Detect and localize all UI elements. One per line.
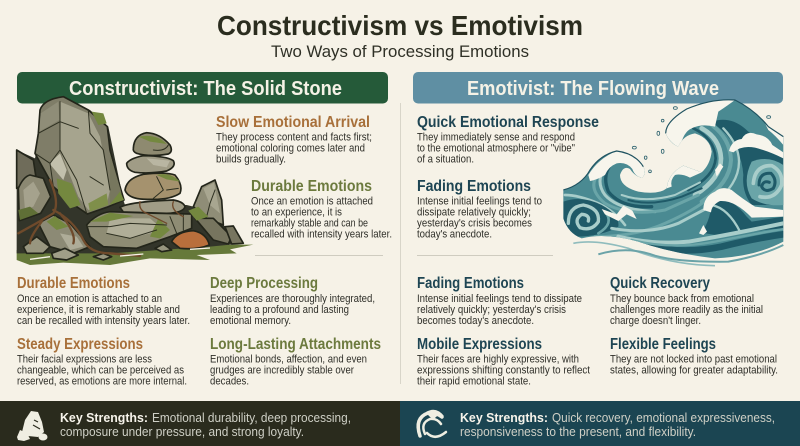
block: fading emotions (upper): yesterday's crisis becomes <box>417 218 533 230</box>
key strengths text: responsiveness to the present, and flexibility. <box>460 424 696 439</box>
constructivist header: Constructivist: The Solid Stone <box>69 78 342 100</box>
block: mobile expressions: expressions shifting constantly to reflect <box>417 364 590 376</box>
block: durable emotions (upper): remarkably stable and can be <box>251 218 368 230</box>
block: durable emotions (upper): recalled with intensity years later. <box>251 228 392 240</box>
block: quick recovery: They bounce back from emotional <box>610 293 754 305</box>
block: durable emotions (upper): Durable Emotions <box>251 178 372 195</box>
block: fading emotions (upper) <box>417 178 542 240</box>
emotivist header: Emotivist: The Flowing Wave <box>467 78 719 100</box>
block: long-lasting attachments <box>210 336 381 388</box>
block: fading emotions (upper): Intense initial feelings tend to <box>417 196 542 208</box>
block: durable emotions (upper): to an experience, it is <box>251 206 343 218</box>
block: long-lasting attachments: Emotional bonds, affection, and even <box>210 354 367 366</box>
key strengths text: Emotional durability, deep processing, <box>152 410 351 425</box>
block: steady expressions: Steady Expressions <box>17 336 143 353</box>
key strengths text <box>60 410 351 439</box>
block: mobile expressions: Their faces are highly expressive, with <box>417 354 579 366</box>
key strengths text <box>460 410 775 439</box>
block: flexible feelings: Flexible Feelings <box>610 336 716 353</box>
block: deep processing <box>210 275 375 327</box>
key strengths bar: emotivist <box>400 401 800 446</box>
block: flexible feelings: states, allowing for greater adaptability. <box>610 364 778 376</box>
block: quick recovery <box>610 275 763 327</box>
panel: constructivist <box>17 72 392 388</box>
key strengths text: Key Strengths: <box>460 410 548 425</box>
block: deep processing: emotional memory. <box>210 315 291 327</box>
key strengths text: Key Strengths: <box>60 410 148 425</box>
block: durable emotions (lower): can be recalled with intensity years later. <box>17 315 190 327</box>
block: quick recovery: challenges more readily as the initial <box>610 304 763 316</box>
block: flexible feelings: They are not locked into past emotional <box>610 354 777 366</box>
block: fading emotions (upper): Fading Emotions <box>417 178 531 195</box>
block: fading emotions (lower): becomes today's anecdote. <box>417 315 534 327</box>
icon: stone <box>17 411 48 441</box>
panel: emotivist <box>413 72 783 388</box>
block: long-lasting attachments: Long-Lasting Attachments <box>210 336 381 353</box>
block: deep processing: leading to a profound and lasting <box>210 304 349 316</box>
block: slow emotional arrival <box>216 114 372 166</box>
block: durable emotions (upper): Once an emotion is attached <box>251 196 373 208</box>
block: durable emotions (lower): Durable Emotions <box>17 275 130 292</box>
foam <box>666 100 735 148</box>
block: durable emotions (upper) <box>251 178 392 240</box>
block: deep processing: Experiences are thoroughly integrated, <box>210 293 375 305</box>
title: Constructivism vs Emotivism <box>217 10 583 41</box>
block: fading emotions (lower): Intense initial feelings tend to dissipate <box>417 293 582 305</box>
block: slow emotional arrival: builds gradually. <box>216 154 286 166</box>
block: steady expressions <box>17 336 187 388</box>
block: quick recovery: charge doesn't linger. <box>610 315 701 327</box>
block: quick emotional response: Quick Emotional Response <box>417 114 599 131</box>
block: fading emotions (upper): today's anecdote. <box>417 228 492 240</box>
block: slow emotional arrival: emotional coloring comes later and <box>216 142 365 154</box>
block: fading emotions (lower): relatively quickly; yesterday's crisis <box>417 304 567 316</box>
subtitle: Two Ways of Processing Emotions <box>271 42 529 61</box>
block: slow emotional arrival: Slow Emotional Arrival <box>216 114 370 131</box>
block: quick emotional response: They immediately sense and respond <box>417 132 575 144</box>
block: mobile expressions <box>417 336 590 388</box>
block: long-lasting attachments: grudges are incredibly stable over <box>210 364 354 376</box>
block: mobile expressions: Mobile Expressions <box>417 336 542 353</box>
block: quick recovery: Quick Recovery <box>610 275 710 292</box>
wave body <box>563 100 783 258</box>
block: quick emotional response: of a situation. <box>417 154 474 166</box>
key strengths text: Quick recovery, emotional expressiveness, <box>552 410 775 425</box>
block: slow emotional arrival: They process content and facts first; <box>216 132 372 144</box>
block: steady expressions: Their facial expressions are less <box>17 354 153 366</box>
block: mobile expressions: their rapid emotional state. <box>417 376 531 388</box>
block: durable emotions (lower): experience, it is remarkably stable and <box>17 304 180 316</box>
emotivist header <box>413 72 783 104</box>
block: fading emotions (lower): Fading Emotions <box>417 275 524 292</box>
block: flexible feelings <box>610 336 778 376</box>
block: durable emotions (lower) <box>17 275 190 327</box>
block: long-lasting attachments: decades. <box>210 376 249 388</box>
block: fading emotions (upper): dissipate relatively quickly; <box>417 206 531 218</box>
illustration: stone pile <box>17 97 253 265</box>
key strengths text: composure under pressure, and strong loyalty. <box>60 424 304 439</box>
constructivist header <box>17 72 388 104</box>
block: fading emotions (lower) <box>417 275 582 327</box>
block: quick emotional response <box>417 114 599 166</box>
block: steady expressions: reserved, as emotions are more internal. <box>17 376 187 388</box>
key strengths bar: constructivist <box>0 401 400 446</box>
block: steady expressions: changeable, which can be perceived as <box>17 364 185 376</box>
illustration: breaking wave <box>563 100 783 266</box>
block: quick emotional response: to the emotional atmosphere or "vibe" <box>417 142 575 154</box>
block: deep processing: Deep Processing <box>210 275 318 292</box>
block: durable emotions (lower): Once an emotion is attached to an <box>17 293 162 305</box>
icon: wave <box>418 410 446 437</box>
